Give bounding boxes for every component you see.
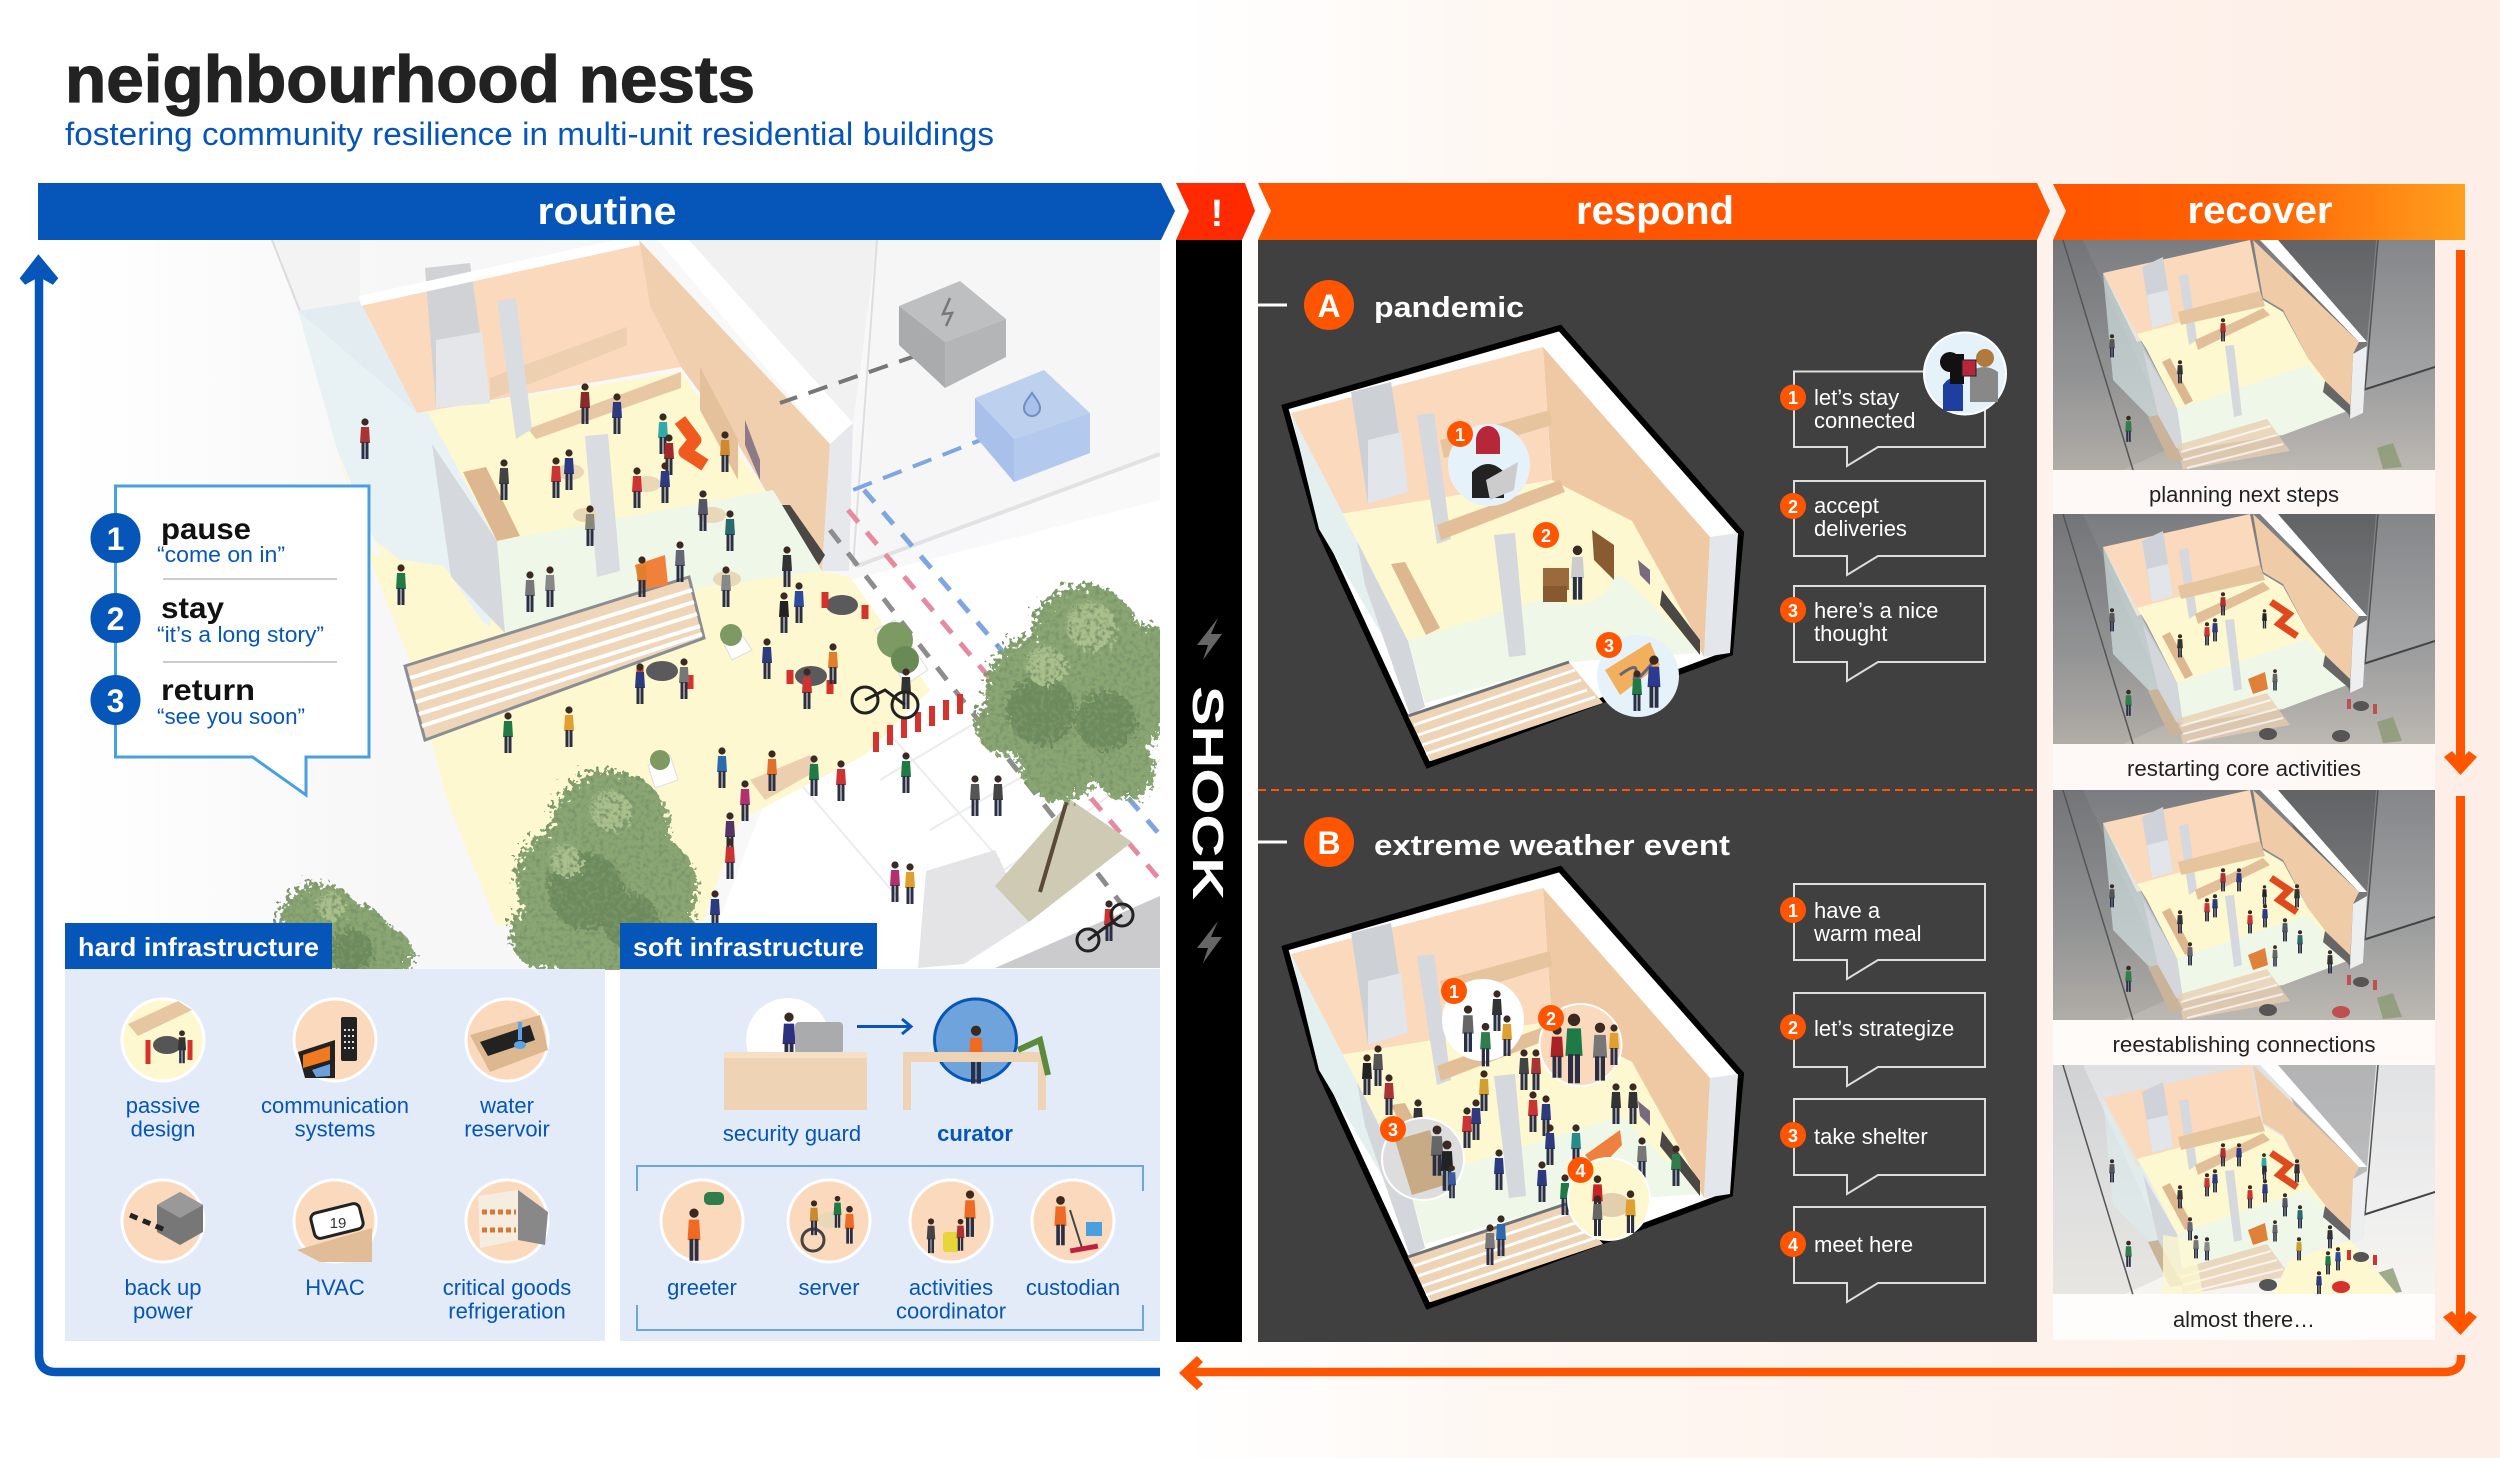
callout B4: meet here <box>1814 1232 1913 1257</box>
callout A1: let’s stay <box>1814 385 1899 410</box>
pause text: “come on in” <box>157 542 285 567</box>
label: water reservoir: water <box>480 1093 534 1118</box>
label: server: server <box>798 1275 860 1300</box>
label: activities coordinator: coordinator <box>896 1298 1006 1324</box>
icon: HVAC <box>294 1180 376 1262</box>
label: communication systems: systems <box>295 1116 375 1142</box>
panel: respond <box>1258 183 2050 1342</box>
steps <box>405 577 704 740</box>
arrow: recover down 1 <box>2444 250 2477 775</box>
caption: planning next steps: planning next steps <box>2149 482 2339 507</box>
arrow: return to shock <box>1179 1355 2461 1390</box>
callout B1: warm meal <box>1813 921 1922 946</box>
heading: hard infrastructure: hard infrastructure <box>78 932 319 962</box>
shock label: SHOCK <box>1183 686 1232 900</box>
detail B4: 4 <box>1575 1161 1586 1181</box>
pipes <box>780 355 918 403</box>
caption: almost there <box>2053 1294 2435 1340</box>
recover image 1 <box>2053 240 2435 470</box>
columns <box>497 298 532 439</box>
routine illustration <box>271 240 1160 970</box>
callout B2: 2 <box>1788 1018 1798 1038</box>
label: communication systems: communication <box>261 1093 409 1118</box>
caption: planning next steps <box>2053 470 2435 514</box>
callout B3 <box>1780 1099 1985 1194</box>
bench <box>750 755 818 800</box>
callout A3: here’s a nice <box>1814 598 1938 623</box>
heading: soft infrastructure <box>620 923 877 969</box>
back wall <box>360 240 681 413</box>
bicycles <box>852 687 1133 951</box>
recover image 4 <box>2053 1065 2435 1295</box>
shock column <box>1176 183 1255 1342</box>
section B heading <box>1304 817 1730 867</box>
icon: passive design <box>122 999 204 1081</box>
icon: activities coordinator <box>910 1180 992 1262</box>
icon: critical goods refrigeration <box>466 1180 548 1262</box>
detail B2 <box>1538 1004 1622 1086</box>
callout: pause stay return <box>90 486 369 795</box>
return text <box>157 674 305 729</box>
caption: reestablishing connections <box>2053 1020 2435 1065</box>
stay text: “it’s a long story” <box>157 622 324 647</box>
icon: lightning top <box>1197 618 1222 660</box>
detail B2: 2 <box>1546 1009 1556 1029</box>
icon: curator <box>903 999 1048 1110</box>
callout B4: 4 <box>1788 1235 1798 1255</box>
section B heading: extreme weather event <box>1374 830 1730 862</box>
badge 1: 1 <box>107 521 124 557</box>
icon: greeter <box>661 1180 743 1262</box>
detail 1 <box>1447 421 1530 506</box>
left glass <box>298 301 497 627</box>
callout B1 <box>1780 884 1985 979</box>
badge 1 <box>90 513 140 563</box>
stay text: stay <box>161 592 224 625</box>
label: critical goods refrigeration: refrigeration <box>448 1298 566 1324</box>
detail B1: 1 <box>1449 982 1459 1002</box>
icon: HVAC: 19 <box>330 1215 346 1232</box>
arrow: guard to curator <box>857 1019 911 1034</box>
callout A1: 1 <box>1788 388 1798 408</box>
icon: custodian <box>1032 1180 1114 1262</box>
callout A3 <box>1780 586 1985 681</box>
callout B4 <box>1780 1207 1985 1302</box>
caption: reestablishing connections: reestablishing connections <box>2112 1032 2376 1057</box>
icon: water reservoir <box>466 999 548 1081</box>
label: passive design: design <box>131 1116 195 1142</box>
respond header <box>1258 183 2050 240</box>
arrow: routine loop <box>23 261 1160 1372</box>
cube: water <box>975 370 1090 482</box>
routine header: routine <box>538 191 676 233</box>
detail 2 <box>1533 522 1616 605</box>
counters <box>490 327 627 400</box>
recover image 3 <box>2053 790 2435 1020</box>
detail 3: 3 <box>1604 636 1614 656</box>
trunk <box>1040 800 1067 892</box>
floor <box>337 372 930 930</box>
caption: almost there: almost there… <box>2173 1307 2315 1332</box>
callout A1 <box>1780 372 1985 466</box>
panel: soft infrastructure <box>620 923 1160 1341</box>
stay text <box>157 592 324 647</box>
callout B1: 1 <box>1788 901 1798 921</box>
label: custodian: custodian <box>1026 1275 1120 1300</box>
tables and chairs <box>556 464 960 752</box>
panel: hard infrastructure <box>65 923 605 1341</box>
callout B2 <box>1780 993 1985 1086</box>
callout A2: 2 <box>1788 497 1798 517</box>
icon: server <box>788 1180 870 1262</box>
callout A2: deliveries <box>1814 516 1907 541</box>
icon: security guard <box>724 998 867 1110</box>
crowd <box>1362 1045 1681 1265</box>
sidewalk planter <box>918 800 1160 968</box>
label: back up power: back up <box>124 1275 202 1300</box>
label: curator: curator <box>937 1121 1013 1146</box>
badge 2: 2 <box>107 601 124 637</box>
callout A2: accept <box>1814 493 1879 518</box>
badge 2 <box>90 593 140 643</box>
return text: return <box>161 674 255 707</box>
section A heading: A <box>1317 288 1341 324</box>
label: back up power: power <box>133 1298 193 1324</box>
shock column: ! <box>1211 193 1223 235</box>
planters <box>648 620 928 788</box>
room A illustration <box>1285 328 1741 765</box>
recover header <box>2053 184 2465 240</box>
trees <box>270 585 1185 990</box>
section A heading <box>1304 280 1524 330</box>
badge 3 <box>90 675 140 725</box>
icon: communication systems <box>294 999 376 1081</box>
label: water reservoir: reservoir <box>464 1116 550 1142</box>
detail B3: 3 <box>1388 1120 1398 1140</box>
callout A3: thought <box>1814 621 1887 646</box>
callout B1: have a <box>1814 898 1880 923</box>
detail 2: 2 <box>1541 526 1551 546</box>
icon: back up power <box>122 1180 204 1262</box>
side wall <box>639 240 830 571</box>
caption: restarting core activities: restarting core activities <box>2127 756 2361 781</box>
callout B3: take shelter <box>1814 1124 1928 1149</box>
icon: lightning bottom <box>1197 921 1222 963</box>
detail B4 <box>1568 1157 1650 1240</box>
subtitle: fostering community resilience in multi-unit residential buildings <box>65 116 994 152</box>
label: activities coordinator: activities <box>909 1275 993 1300</box>
detail B3 <box>1380 1116 1464 1200</box>
recover image 2 <box>2053 514 2435 744</box>
room B illustration <box>1285 869 1741 1306</box>
callout A1: connected <box>1814 408 1916 433</box>
callout B2: let’s strategize <box>1814 1016 1954 1041</box>
icon: video call circle <box>1924 332 2006 414</box>
section A heading: pandemic <box>1374 292 1524 324</box>
routine header <box>38 183 1175 240</box>
detail 1: 1 <box>1455 425 1465 445</box>
detail B1 <box>1441 978 1524 1066</box>
pause text <box>157 513 285 567</box>
callout A2 <box>1780 481 1985 575</box>
caption: restarting core activities <box>2053 744 2435 790</box>
label: critical goods refrigeration: critical goods <box>443 1275 571 1300</box>
callout A3: 3 <box>1788 601 1798 621</box>
heading: soft infrastructure: soft infrastructure <box>633 932 864 962</box>
sofa <box>680 420 705 465</box>
label: security guard: security guard <box>723 1121 861 1146</box>
label: passive design: passive <box>126 1093 200 1118</box>
recover header: recover <box>2188 190 2333 232</box>
section B heading: B <box>1317 825 1341 861</box>
heading: hard infrastructure <box>65 923 332 969</box>
badge 3: 3 <box>107 683 124 719</box>
callout B3: 3 <box>1788 1126 1798 1146</box>
title: neighbourhood nests <box>65 42 755 116</box>
pause text: pause <box>161 513 251 546</box>
label: greeter: greeter <box>667 1275 737 1300</box>
detail 3 <box>1596 632 1679 717</box>
arrow: recover down 2 <box>2443 796 2477 1335</box>
bracket <box>637 1166 1143 1330</box>
respond header: respond <box>1576 189 1734 233</box>
glass front <box>497 490 822 633</box>
return text: “see you soon” <box>157 704 305 729</box>
people <box>360 383 1114 941</box>
cube: power <box>899 281 1006 388</box>
label: HVAC: HVAC <box>305 1275 365 1300</box>
